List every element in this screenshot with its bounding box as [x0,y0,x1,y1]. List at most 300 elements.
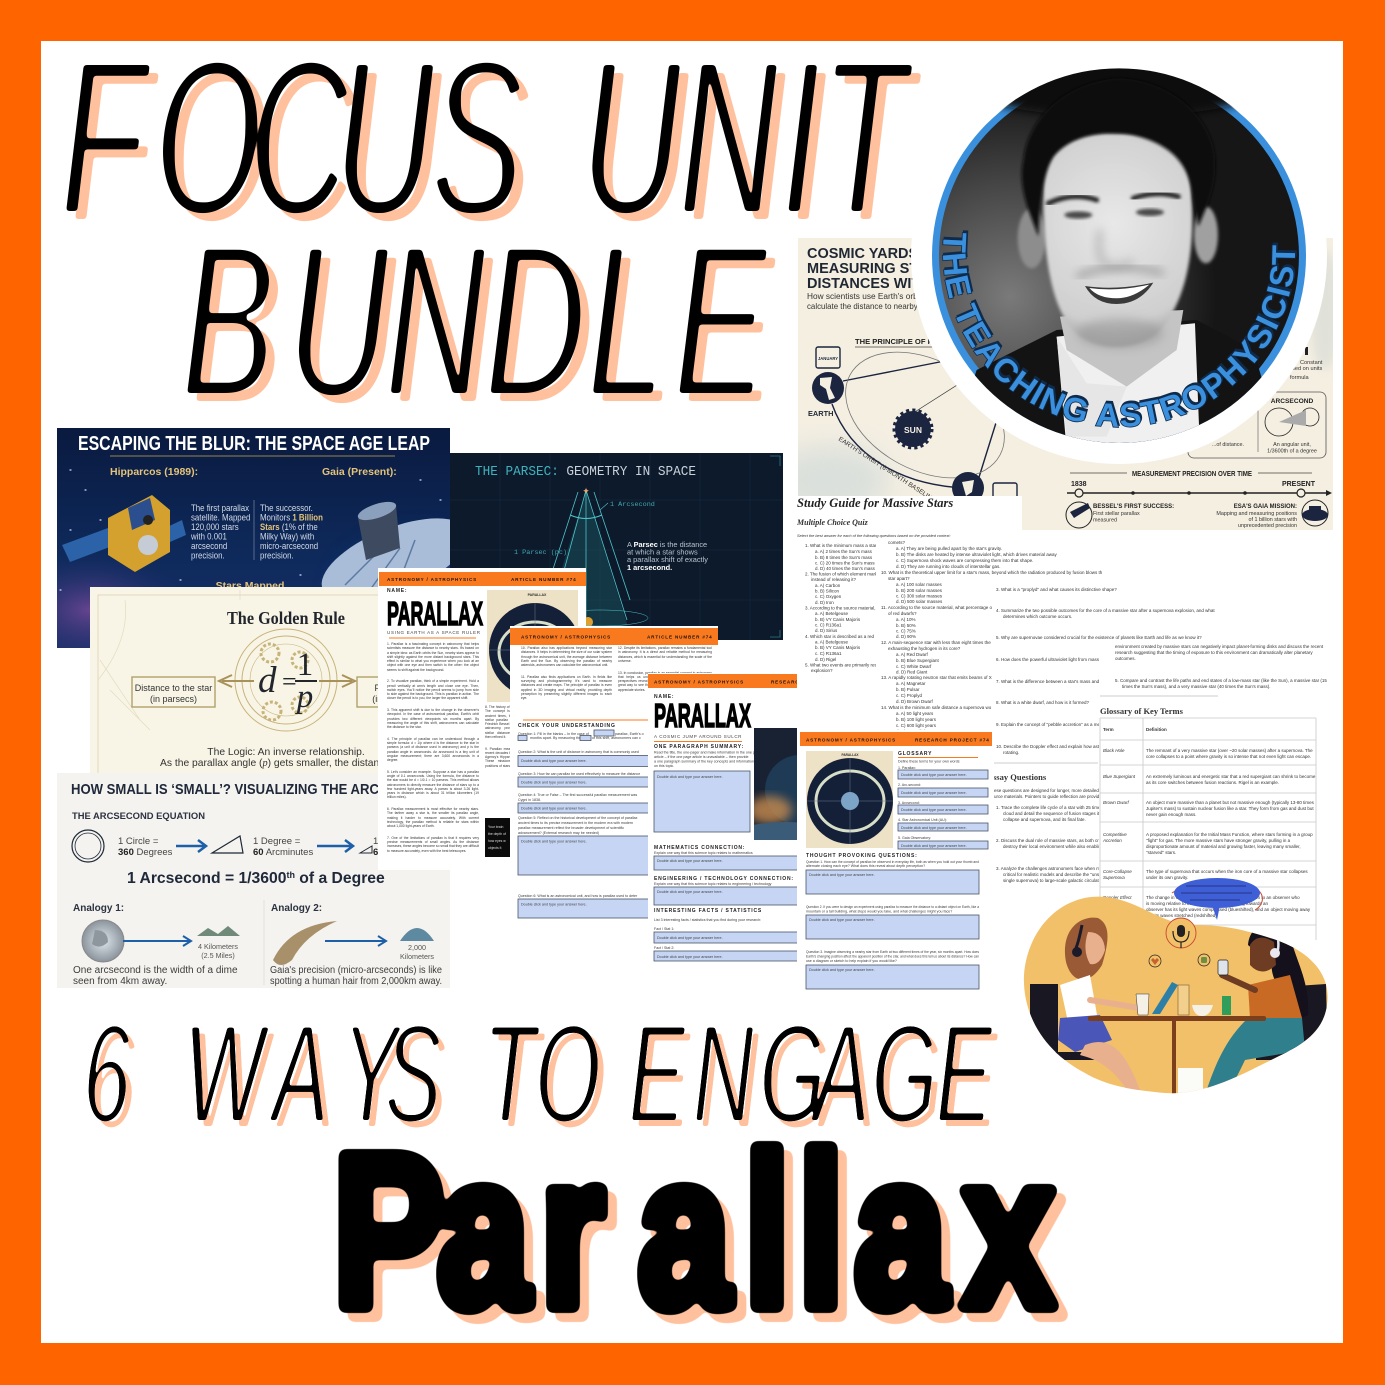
quiz column one: a. A) Betelgeuse [815,640,849,644]
analogy 1: seen from 4km away. [73,976,167,987]
orange header bar: ASTRONOMY / ASTROPHYSICS [654,680,744,684]
speech bubble [1172,878,1262,920]
essay column [994,658,1099,883]
equation row: 1 Circle = [118,836,159,847]
black callout box [485,818,510,857]
quiz column two: comets? [888,540,906,545]
glossary fields: 2. Arc-second: [898,783,921,787]
panel subtitle: How scientists use Earth's orbital shift to [807,291,955,301]
quiz column two: c. C) Proplyd [896,693,923,698]
arrow: parallax angle [319,675,355,687]
orange header bar: ASTRONOMY / ASTROPHYSICS [521,634,611,640]
quiz column two: c. C) White Dwarf [896,664,932,669]
label box: parallax angle: Parallax angle [374,683,432,693]
parallax diagram: EARTH'S ORBIT (6-MONTH BASELINE) [837,436,938,505]
essay continuation: research suggesting that the timing of exposure to this environment can dramatically alter planetary [1115,650,1313,655]
panel title [808,248,912,288]
glossary fields: Double click and type your answer here. [901,773,967,777]
worksheet page: article, page 2: 13. In conclusion, parallax is an essential concept in astronomy that helps us understand distances. It's a tool different perspectives reveal the universe. For example, parallax is a great way to see the measures of distance, parallax helps us appreciate stories. [618,670,712,692]
formula d = 1/p [259,654,317,714]
panel: how small is small slide [57,773,450,988]
article body text: 5. Let's consider an example. Suppose a star has a parallax angle of 0.1 arcseconds. Using the formula, the distance to the star would be d = 1/0.1 = 10 parsecs. This method allows astronomers to directly measure the distance of stars up to a few hundred light-years away. A parsec is about 3.26 light-years in distance which is about 31 trillion kilometers (19 trillion miles). [387,770,479,799]
thought provoking questions: Question 3. Imagine observing a nearby star from Earth at two different times of the year, six months apart. How does [806,950,979,954]
equation row: 60 Arcminutes [253,847,313,858]
article subtitle: USING EARTH AS A SPACE RULER [387,630,481,635]
glossary of key terms table: Glossary of Key Terms [1100,706,1184,716]
panel: cosmic yardstick infographic [770,238,1340,530]
parsec definition: a parallax shift of exactly [627,555,708,564]
orange header bar: ASTRONOMY / ASTROPHYSICS [387,577,477,582]
one paragraph summary: Double click and type your answer here. [657,775,723,779]
key equation: 1 Arcsecond = 1/3600 [127,870,286,887]
glossary fields [898,751,988,849]
quiz column two: b. B) The disks are heated by intense ultraviolet light, which drives material away [896,552,1057,557]
quiz column two: 13. A rapidly rotating neutron star that emits beams of X [881,675,992,680]
essay column: collapse and supernova, and its final fate. [1003,817,1086,822]
essay continuation: environment created by massive stars can negatively impact planet-forming disks and discuss the recent [1115,644,1324,649]
glossary of key terms table: Black Hole [1103,748,1125,753]
Gaia heading: Gaia (Present): [322,466,397,478]
dial illustration [487,590,581,702]
essay column: rotating. [1003,750,1019,755]
engineering connection [654,876,800,905]
name field: NAME: [654,694,674,700]
glossary fields: Double click and type your answer here. [901,791,967,795]
interesting facts: INTERESTING FACTS / STATISTICS [654,908,762,914]
project headline: PARALLAX [654,697,751,734]
quiz column two: a. A) 50 light years [896,711,934,716]
black callout box: the depth of [488,832,506,836]
article body text: 2. To visualize parallax, think of a simple experiment. Hold a pencil vertically at arm's length and close one eye. Then, switch eyes. You'll notice the pencil seems to jump from side to side against the background. This is parallax in action. The closer the pencil is to you, the larger the apparent shift. [387,679,479,700]
quiz column two: d. D) 500 solar masses [896,599,943,604]
article columns: 10. Parallax also has applications beyond measuring star distances. It helps in determining the size of our solar system through the astronomical unit, the average distance between Earth and the Sun. By observing the parallax of nearby asteroids, astronomers can calculate the astronomical unit. [521,646,612,667]
interesting facts: Fact / Stat 2: [654,946,674,950]
panel: the parsec slide: 1 Parsec (pc) [514,549,567,557]
thought provoking questions: mountain or a tall building, what steps would you take, and what challenges might you face? [806,910,952,914]
essay column: 6. How does the powerful ultraviolet light from massive stars affect [996,657,1129,662]
orange header bar [510,628,718,645]
essay column: 7. What is the difference between a star's mass and its luminosity [996,679,1127,684]
mathematics connection: Explain one way that this science topic relates to mathematics [654,851,753,855]
glossary of key terms table: Blue Supergiant [1103,774,1136,779]
logic caption [160,748,378,768]
glossary of key terms table: disproportionate amount of material and growing faster, leaving many smaller, [1146,844,1301,849]
analogy 2: Analogy 2: [271,903,322,914]
quiz column one: b. B) Silicon [815,588,840,594]
quiz column one: 1. What is the minimum mass a star [805,543,877,548]
panel subtitle: calculate the distance to nearby stars [807,301,937,311]
study guide title: Study Guide for Massive Stars [797,496,953,510]
black callout box: objects it [488,846,501,850]
essay column: ese questions are designed for longer, more detailed responses [994,788,1122,793]
Gaia description: Milky Way) with [260,531,314,542]
black callout box: Your brain [488,825,503,829]
essay column: 10. Describe the Doppler effect and explain how astronomers use it [996,744,1131,749]
arcsecond definition box [1188,392,1326,458]
essay continuation: outcomes. [1115,656,1136,661]
glossary of key terms table: Doppler Effect [1103,895,1132,900]
quiz questions and answer boxes: months apart. By measuring the [530,736,581,740]
equation row: 1 Arcminute = [373,836,432,847]
article body text: 7. One of the limitations of parallax is that it requires very precise measurements of small angles. As the distance increases, these angles become so small that they are difficult to measure accurately, even with the best telescopes. [387,836,479,852]
label box: distance [132,677,215,707]
quiz column two: d. D) Brown Dwarf [896,699,934,704]
quiz column one: b. B) 8 times the Sun's mass [815,555,873,560]
glossary fields: 3. Arcsecond: [898,801,920,805]
thought provoking questions: Double click and type your answer here. [809,873,875,877]
worksheet page: research project, page 1 [648,673,797,962]
formula d = 1/p: d [258,660,277,701]
quiz heading: Multiple Choice Quiz [796,518,869,527]
Hipparcos description: satellite. Mapped [191,512,251,523]
mathematics connection: Double click and type your answer here. [657,859,723,863]
slide title: HOW SMALL IS ‘SMALL’? VISUALIZING THE ARCSECOND [71,782,435,798]
quiz column two: of red dwarfs? [888,611,917,616]
glossary of key terms table: ... where the external ... from the [1146,933,1211,938]
essay column: ssay Questions [993,772,1047,782]
quiz column two: c. C) 300 solar masses [896,594,943,598]
quiz questions and answer boxes: Double click and type your answer here. [521,759,587,763]
essay column: 8. What is a white dwarf, and how is it formed? [996,700,1090,705]
icon: Gaia spacecraft [322,502,450,587]
timeline: measurement precision over time: PRESENT [1282,481,1316,488]
right figure [1205,923,1308,1095]
Hipparcos heading: Hipparcos (1989): [110,466,198,478]
icon: thumbs up badge [1198,954,1210,966]
interesting facts: Fact / Stat 1: [654,927,674,931]
short answer questions: 3. What is a "proplyd" and what causes its distinctive shape? [996,587,1117,592]
parallax diagram: JANUARY [818,356,838,361]
quiz column one [805,543,878,673]
heading: Bundle: BUNDLE [182,199,768,442]
quiz column one: 3. According to the source material, [805,606,876,610]
essay column: 3. Analyze the challenges astronomers face when modeling [996,866,1115,871]
quiz questions and answer boxes: Double click and type your answer here. [521,806,587,810]
quiz column two: b. B) 200 solar masses [896,588,943,593]
logic caption: As the parallax angle (p) gets smaller, the distance (d) gets larger. [160,758,459,769]
quiz column one: d. D) Rigel [815,657,836,662]
quiz column one: a. A) Carbon [815,583,841,588]
timeline: measurement precision over time: First stellar parallax [1093,511,1140,517]
illustration: two people listening to a podcast [1024,878,1328,1098]
quiz column one: 4. Which star is described as a red [805,634,875,639]
arcsecond definition box: 1/3600th of a degree [1267,448,1317,454]
interesting facts: List 3 interesting facts / statistics that you find during your research: [654,918,761,922]
diagram labels: 1 Arcsecond [610,501,655,509]
worksheet page: article, page 2 [510,626,718,922]
icon: Hipparcos satellite [62,495,186,572]
glossary of key terms table: Jupiter's mass) to sustain nuclear fusion like a star. They form from gas and dust but [1146,806,1314,811]
quiz column two: 11. According to the source material, what percentage o [881,605,992,610]
engineering connection: Explain one way that this science topic relates to engineering / technology [654,882,772,886]
quiz questions and answer boxes: Question 1: Fill in the blanks – In the case of [518,732,589,736]
one paragraph summary [654,744,761,832]
quiz column two: a. A) They are being pulled apart by the star's gravity. [896,546,1002,551]
glossary of key terms table: Term [1103,727,1114,732]
panel title: DISTANCES WITH PARALLAX [807,276,1013,292]
orange header bar [648,674,852,688]
key equation: th [286,870,295,880]
glossary of key terms table: The remnant of a very massive star (over ~20 solar masses) after a supernova. The [1146,748,1313,753]
essay column: urce materials. Pointers to guide reflection are provided [994,794,1105,799]
quiz column one: a. A) Betelgeuse [815,611,849,616]
glossary of key terms table: A proposed explanation for the Initial Mass Function, where stars forming in a group [1146,832,1313,837]
heading: Bundle: BUNDLE [191,207,777,450]
quiz column two: b. B) Pulsar [896,687,920,692]
chart label: stars mapped: Stars Mapped [216,580,284,592]
portrait photo [939,37,1299,450]
essay continuation: 5. Compare and contrast the life paths and end states of a low-mass star (like the Sun), a massive star (15 [1115,678,1327,683]
analogy 1: 4 Kilometers [198,942,238,951]
analogy 1: (2.5 Miles) [201,951,235,960]
glossary of key terms table: is moving relative to the source. An object moving towards an [1146,901,1269,906]
equation row: 1 Degree = [253,836,301,847]
glossary of key terms table: The type of supernova that occurs when the iron core of a massive star collapses [1146,869,1308,874]
Gaia description [260,502,323,561]
analogy 2: Gaia's precision (micro-arcseconds) is like [270,965,442,976]
name field: NAME: [387,588,407,594]
heading: Focus Unit: FOCUS UNIT [61,14,914,261]
quiz column one: explosion? [811,668,833,673]
article body text: 3. This apparent shift is due to the change in the observer's viewpoint. In the case of astronomical parallax, Earth's orbit provides two different viewpoints six months apart. By measuring the angle of this shift, astronomers can calculate the distance to the star. [387,708,479,729]
quiz questions and answer boxes: Double click and type your answer here. [521,780,587,784]
chairs [1030,984,1058,1074]
project subtitle: A COSMIC JUMP AROUND SULCR [654,734,742,739]
equation row [72,830,440,862]
glossary of key terms table: An extremely luminous and energetic star that a red supergiant can shrink to become [1146,774,1316,779]
quiz column two: 14. What is the minimum safe distance a supernova wo [881,705,992,710]
second column fragments: 9. Parallax measurement advanced in recent decades by the European Space Agency's Hipparcos mission, and Gaia. These missions have mapped the positions of stars. [485,746,545,768]
article body text: 6. Parallax measurement is most effective for nearby stars. The farther away a star is, the smaller its parallax angle, making it harder to measure accurately. With current technology, the parallax method is reliable for stars within about 1,000 light-years of Earth. [387,807,479,828]
arrow: distance [219,675,254,687]
timeline: measurement precision over time: MEASUREMENT PRECISION OVER TIME [1132,469,1252,478]
quiz questions and answer boxes: Question 5: Reflect on the historical development of the concept of parallax [518,816,638,820]
Hipparcos description: The first parallax [191,502,250,513]
glossary of key terms table: core collapses to a point where gravity is so intense that not even light can escape. [1146,754,1311,759]
thought provoking questions: alternate closing each eye? What does this reveal about depth perception? [806,864,925,868]
orange header bar: RESEARCH PROJECT #74 [771,680,846,684]
quiz column one: 2. The fusion of which element mark [805,572,878,576]
analogy 1 [73,903,240,987]
quiz column one: d. D) Sirius [815,628,838,633]
timeline: measurement precision over time: 1838 [1071,481,1087,488]
essay column: 9. Explain the concept of "pebble accretion" as a mechanism [996,722,1117,727]
thought provoking questions: Question 1. How can the concept of parallax be observed in everyday life, both as when you hold out your thumb and [806,860,979,864]
Gaia description: The successor. [260,502,313,513]
glossary of key terms table: Definition [1146,727,1167,732]
parallax diagram: SUN [904,425,922,435]
formula notes: ased on units [1289,366,1322,372]
timeline: measurement precision over time: unprecedented precision [1238,523,1297,529]
engineering connection: ENGINEERING / TECHNOLOGY CONNECTION: [654,876,794,882]
glossary of key terms table: observer has its light waves compressed (blueshifted), and an object moving away [1146,907,1311,912]
thought provoking questions: THOUGHT PROVOKING QUESTIONS: [806,853,918,859]
thought provoking questions: Double click and type your answer here. [809,968,875,972]
Hipparcos description [190,502,251,561]
space illustration [754,728,797,840]
timeline: measurement precision over time: measured [1093,518,1117,524]
left figure [1058,918,1140,1095]
Hipparcos description: 120,000 stars [191,521,239,532]
parsec definition [627,542,708,570]
quiz questions and answer boxes: Question 2: What is the unit of distance in astronomy that is commonly used [518,750,639,754]
arcsecond definition box: An angular unit, [1273,442,1311,448]
quiz column two: d. D) Red Giant [896,670,928,674]
essay column: single supernova) to large-scale galactic circulation [1003,878,1105,883]
formula notes: formula [1290,375,1310,381]
heading: Focus Unit: FOCUS UNIT [70,22,923,269]
one paragraph summary: on this topic. [654,764,674,768]
quiz questions and answer boxes: Double click and type your answer here. [521,902,587,906]
quiz column two: c. C) 600 light years [896,723,937,728]
thought provoking questions: use a diagram or sketch to help explain if you would like? [806,959,897,963]
thought provoking questions: Double click and type your answer here. [809,918,875,922]
article columns [521,646,612,716]
label box: distance: Distance to the star [135,683,212,693]
quiz column two: d. D) They are running into clouds of interstellar gas. [896,564,1000,569]
quiz column two: c. C) 75% [896,628,916,634]
panel subtitle [807,293,917,310]
timeline: measurement precision over time: of 1 billion stars with [1248,517,1297,523]
arcsecond definition box: ARCSECOND [1271,398,1313,405]
quiz questions and answer boxes: ancient times to its precise measurement in the modern era with modern [518,821,633,825]
portrait badge: The Teaching Astrophysicist: THE TEACHING ASTROPHYSICIST [942,230,1297,428]
quiz column one: b. B) VY Canis Majoris [815,645,861,650]
quiz column two: 10. What is the theoretical upper limit for a star's mass, beyond which the radiation produced by fusion blows the [881,570,1105,575]
arcsecond definition box: ...of distance. [1212,442,1244,448]
quiz column one: c. C) R136a1 [815,622,842,628]
quiz questions and answer boxes: parallax, Earth's o [615,732,644,736]
one paragraph summary: Read the title, the one-pager and make information in the one page [654,750,761,754]
quiz column two: c. C) Supernova shock waves are compressing them into that shape. [896,558,1033,563]
glossary of key terms table: never gain enough mass. [1146,812,1197,817]
quiz questions and answer boxes [518,730,653,918]
orange header bar: RESEARCH PROJECT #74 [915,738,990,742]
orange header bar [379,572,586,586]
Hipparcos description: arcsecond [191,540,227,551]
quiz column two: 12. A main-sequence star with less than eight times the [881,640,991,645]
quiz questions and answer boxes: parallax measurement reflect the broader development of scientific [518,826,624,830]
glossary of key terms table: The change in frequency or wavelength of light in relation to an observer who [1146,895,1300,900]
equation row: 60 Arcseconds [373,847,440,858]
key equation: of a Degree [295,870,385,887]
panel: the parsec slide [450,453,783,640]
quiz column two: d. D) 90% [896,634,916,639]
thought provoking questions: Earth's changing position affect the apparent position of the star, and what does this tell us about its distance? How can [806,954,979,958]
quiz column two: a. A) 100 solar masses [896,582,943,587]
quiz column one: instead of releasing it? [811,577,857,582]
article body text [387,642,479,867]
quiz column one: c. C) 20 times the Sun's mass [815,560,875,566]
glossary of key terms table: Competitive [1103,832,1127,837]
glossary fields: Define these terms for your own words [898,760,960,764]
worksheet page: study guide for massive stars [796,496,1327,990]
short answer questions: 4. Summarize the two possible outcomes for the core of a massive star after a supernova explosion, and what [996,608,1215,613]
parallax diagram [808,339,1018,496]
quiz questions and answer boxes: advancement? (External research may be needed) [518,831,599,835]
short answer questions: 5. Why are supernovae considered crucial for the existence of planets like Earth and life as we know it? [996,635,1202,640]
quiz column two: a. A) 10% [896,617,916,622]
portrait badge: The Teaching Astrophysicist [911,68,1327,464]
glossary of key terms table [1100,706,1316,940]
quiz column two: b. B) 50% [896,623,916,628]
orange header bar: ARTICLE NUMBER #74 [511,577,577,582]
mathematics connection: MATHEMATICS CONNECTION: [654,845,745,851]
quiz column one: c. C) Oxygen [815,594,842,599]
triangle diagram [553,488,648,626]
quiz questions and answer boxes: of this shift, astronomers can c [592,736,641,740]
interesting facts: Double click and type your answer here. [657,936,723,940]
analogy 2 [270,903,442,987]
heading: 6 ways to engage: 6 WAYS TO ENGAGE [83,996,993,1152]
glossary of key terms table: Core-Collapse [1103,869,1132,874]
timeline: measurement precision over time: ESA'S GAIA MISSION: [1234,504,1297,510]
essay column: 2. Discuss the dual role of massive stars, as both creators [996,838,1112,843]
formula d = 1/p: p [295,679,313,715]
thought provoking questions [806,853,979,989]
essay column: 1. Trace the complete life cycle of a star with 25 times [996,805,1104,810]
parallax diagram: THE PRINCIPLE OF PARALLAX [855,337,968,346]
black callout box: how eyes w [488,839,506,843]
Gaia description: precision. [260,550,294,561]
orange header bar [800,732,992,746]
panel title: COSMIC YARDSTICK: [807,246,957,262]
orange header bar: ARTICLE NUMBER #74 [647,634,713,640]
article columns: 11. Parallax also finds applications on Earth. In fields like surveying and photogrammetry, it's used to measure distances and create maps. The principle of parallax is even applied in 3D imaging and virtual reality, providing depth perception by presenting slightly different images to each eye. [521,675,612,700]
heading: Parallax: Parallax [333,1110,1055,1353]
glossary fields: 5. Gaia Observatory: [898,836,931,840]
slide title: THE PARSEC: GEOMETRY IN SPACE [475,464,696,480]
parsec definition: A Parsec is the distance [627,540,707,549]
formula d = 1/p: 1 [297,647,313,683]
quiz column two: exhausting the hydrogen in its core? [888,646,961,651]
equation row: 360 Degrees [118,847,173,858]
quiz column two: d. D) 1,000 light years [896,729,941,734]
article headline: PARALLAX [387,595,483,632]
one paragraph summary: article – if the one page article is unavailable – then provide [654,755,748,759]
formula notes [1289,347,1323,381]
essay column: cloud and detail the sequence of fusion stages it [1003,811,1100,816]
timeline: measurement precision over time: BESSEL'S FIRST SUCCESS: [1093,504,1174,510]
dial illustration: PARALLAX [528,593,547,597]
Gaia description: Stars (1% of the [260,521,318,532]
timeline: measurement precision over time: Mapping and measuring positions [1216,511,1297,517]
label box: parallax angle: (in arcseconds) [372,694,434,704]
glossary of key terms table: "fight" for gas. The more massive stars have stronger gravity, pulling in a [1146,838,1291,843]
Hipparcos description: precision. [191,550,225,561]
quiz instructions: Select the best answer for each of the following questions based on the provided context: [797,533,951,538]
essay continuation [1100,644,1327,696]
analogy 1: Analogy 1: [73,903,124,914]
panel title: MEASURING STELLAR [807,261,967,277]
glossary fields: GLOSSARY [898,751,932,757]
worksheet page: article, page 1 [378,568,586,870]
heading: 6 ways to engage: 6 WAYS TO ENGAGE [89,1002,999,1158]
quiz column two: star apart? [888,576,910,581]
quiz questions and answer boxes: Double click and type your answer here. [521,840,587,844]
glossary of key terms table: "starved" stars. [1146,850,1176,855]
slide title: The Golden Rule [227,608,345,628]
glossary fields: 4. Star Astronomical Unit (AU): [898,818,947,822]
mathematics connection [654,845,800,870]
parallax diagram: EARTH [808,409,833,418]
Hipparcos description: with 0.001 [190,531,227,542]
quiz column one: c. C) R136a1 [815,651,842,656]
short answer questions [996,587,1215,640]
worksheet page: research project, page 2 [800,730,993,992]
glossary of key terms table: Accretion [1102,838,1122,843]
quiz column two: b. B) Blue Supergiant [896,658,940,663]
